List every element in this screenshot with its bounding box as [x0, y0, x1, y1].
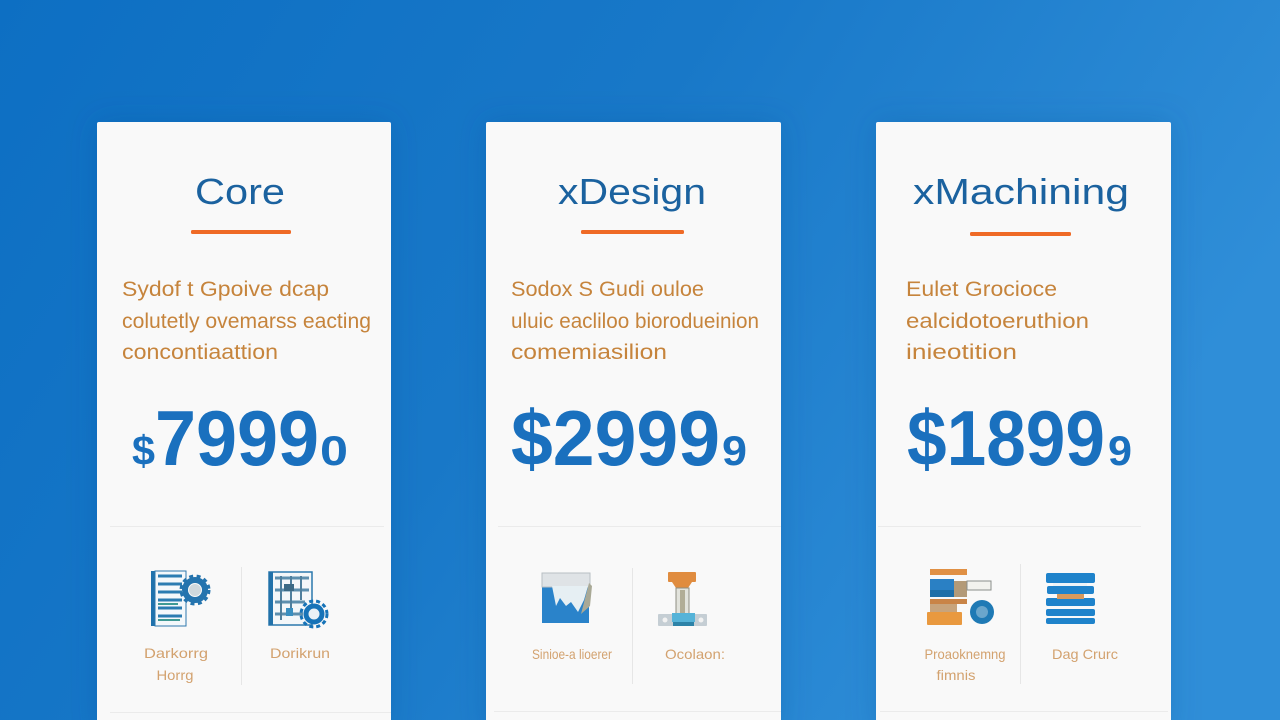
panel: xMachining — [876, 122, 1171, 720]
label: Sinioe-a lioerer — [532, 646, 612, 662]
icon: grid with gear — [269, 572, 327, 627]
price: $1899 — [907, 394, 1105, 482]
label: Horrg — [156, 667, 194, 683]
description: colutetly ovemarss eacting — [122, 310, 371, 333]
description: comemiasilion — [511, 341, 667, 364]
description: inieotition — [906, 341, 1017, 364]
heading underline — [970, 232, 1071, 236]
description — [122, 278, 371, 364]
price: 9 — [722, 427, 747, 474]
price: $2999 — [511, 394, 720, 482]
price: 7999 — [155, 394, 319, 482]
description — [511, 278, 759, 364]
heading underline — [191, 230, 291, 234]
panel: xDesign — [486, 122, 781, 720]
icon: blue rack — [1046, 573, 1095, 624]
panel: Core — [97, 122, 391, 720]
label — [924, 646, 1006, 683]
label: Dag Crurc — [1052, 646, 1118, 662]
card background — [97, 122, 391, 720]
description: Eulet Grocioce — [906, 278, 1057, 301]
label: fimnis — [936, 667, 976, 683]
description: concontiaattion — [122, 341, 278, 364]
description: ealcidotoeruthion — [906, 310, 1089, 333]
price: 9 — [1108, 427, 1132, 474]
label: Ocolaon: — [665, 646, 725, 662]
description: uluic eacliloo biorodueinion — [511, 310, 759, 333]
heading: Core: Core — [195, 171, 285, 212]
label: Proaoknemng — [924, 646, 1006, 662]
card background — [876, 122, 1171, 720]
heading: xDesign: xDesign — [558, 171, 706, 212]
card background — [486, 122, 781, 720]
price: $ — [132, 427, 155, 474]
icon: machine stack with globe — [927, 569, 994, 625]
icon: blue panel — [542, 573, 592, 623]
description — [906, 278, 1089, 364]
heading underline — [581, 230, 684, 234]
heading: xMachining: xMachining — [913, 171, 1129, 212]
label: Dorikrun — [270, 645, 330, 661]
label: Darkorrg — [144, 645, 208, 661]
price: 0 — [320, 427, 348, 474]
icon: document with gear — [151, 571, 209, 626]
label — [144, 645, 208, 683]
description: Sodox S Gudi ouloe — [511, 278, 704, 301]
icon: clamp tool — [658, 572, 707, 626]
description: Sydof t Gpoive dcap — [122, 278, 329, 301]
